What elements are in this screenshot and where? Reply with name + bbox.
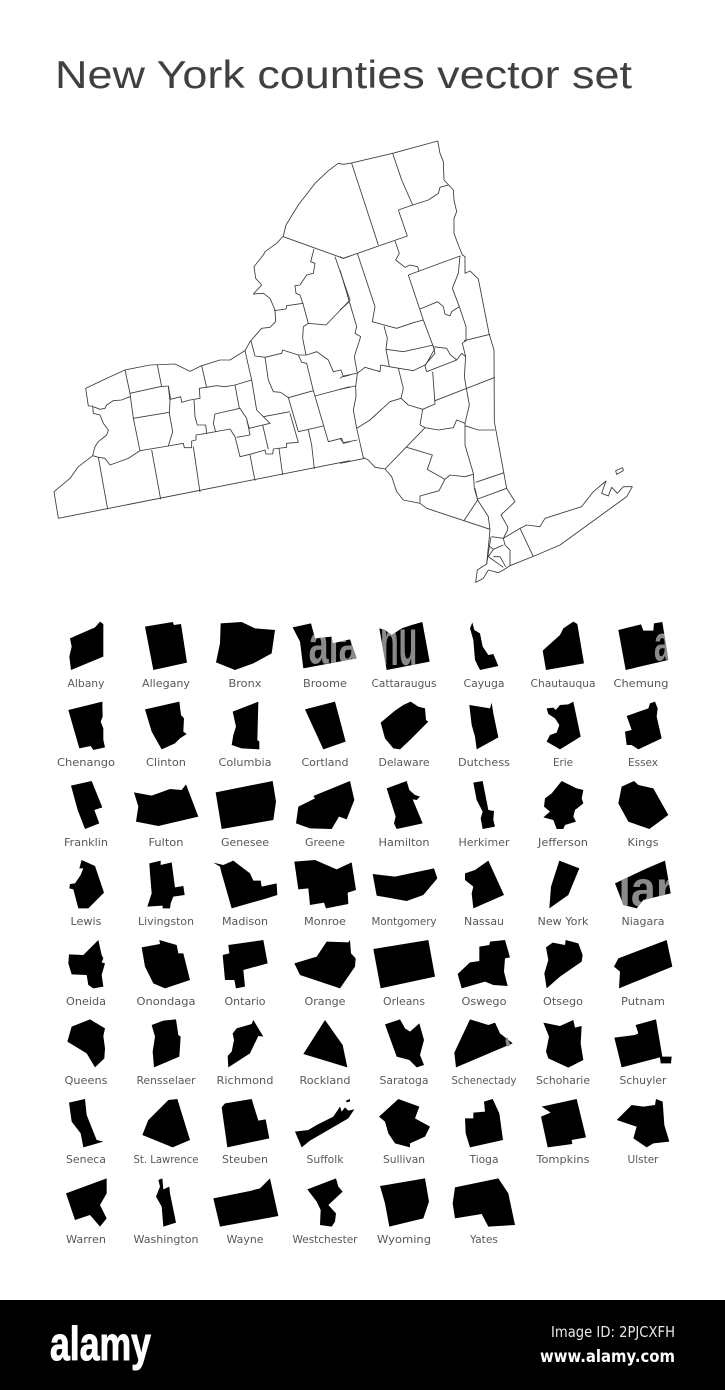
county: Albany: Albany — [68, 678, 104, 690]
county: Cayuga — [464, 622, 504, 690]
county: Schoharie: Schoharie — [536, 1075, 590, 1087]
county: Erie — [547, 702, 581, 769]
county: Orange: Orange — [304, 996, 346, 1008]
county: Oneida — [66, 940, 106, 1008]
county: Sullivan: Sullivan — [383, 1154, 425, 1166]
county: Wyoming — [377, 1178, 431, 1246]
county: Kings: Kings — [628, 837, 658, 849]
county: Cortland: Cortland — [302, 757, 348, 769]
county: Rensselaer: Rensselaer — [136, 1075, 196, 1087]
county: Greene — [296, 781, 354, 849]
county: Ulster — [617, 1099, 669, 1166]
county: Columbia: Columbia — [218, 757, 272, 769]
county: Monroe: Monroe — [304, 916, 346, 928]
county: Albany — [68, 622, 104, 690]
county: Essex — [625, 702, 662, 769]
county: Queens — [64, 1019, 108, 1087]
county: Clinton — [145, 702, 187, 769]
county: Bronx — [216, 622, 275, 690]
county: Herkimer — [458, 781, 510, 849]
county: Wyoming: Wyoming — [377, 1234, 431, 1246]
county: Oswego: Oswego — [462, 996, 506, 1008]
county: Tioga: Tioga — [468, 1154, 498, 1166]
county: Schuyler — [614, 1019, 672, 1087]
county: Schoharie — [536, 1020, 590, 1087]
county: Chemung: Chemung — [614, 678, 668, 690]
county: Monroe — [294, 860, 356, 928]
county: Nassau: Nassau — [464, 916, 504, 928]
county: Jefferson — [537, 781, 588, 849]
county: Rensselaer — [136, 1019, 196, 1087]
county: Ontario — [223, 940, 268, 1008]
county: Wayne — [213, 1178, 278, 1246]
county: Tompkins: Tompkins — [535, 1154, 590, 1166]
county: Schenectady — [452, 1019, 516, 1087]
county: Richmond — [216, 1020, 274, 1087]
county: Seneca: Seneca — [66, 1154, 106, 1166]
county: Oswego — [458, 940, 510, 1008]
county: Cortland — [302, 702, 348, 769]
county: Ontario: Ontario — [224, 996, 266, 1008]
county: Genesee: Genesee — [221, 837, 269, 849]
county: Onondaga — [136, 940, 196, 1008]
county: Allegany — [142, 622, 190, 690]
county: New York: New York — [538, 916, 589, 928]
county: Madison — [213, 861, 277, 928]
county: Chemung — [614, 622, 668, 689]
county: Bronx: Bronx — [228, 678, 262, 690]
county: Montgomery — [372, 868, 437, 928]
county: Tompkins — [535, 1099, 590, 1166]
county: Livingston — [138, 861, 194, 928]
county: Warren — [66, 1178, 107, 1246]
county: Warren: Warren — [66, 1234, 106, 1246]
county: Chenango — [57, 702, 115, 769]
county: Fulton: Fulton — [148, 837, 184, 849]
county: Hamilton: Hamilton — [378, 837, 430, 849]
county: Saratoga: Saratoga — [380, 1075, 428, 1087]
county: Genesee — [216, 781, 276, 849]
website: www.alamy.com — [540, 1347, 675, 1367]
county: Onondaga: Onondaga — [136, 996, 196, 1008]
county: Dutchess — [458, 703, 510, 769]
county: Cattaraugus: nu — [380, 606, 417, 680]
county: Columbia — [218, 702, 272, 769]
county: Richmond: Richmond — [216, 1075, 274, 1087]
county: Delaware — [378, 702, 430, 769]
county: Dutchess: Dutchess — [458, 757, 510, 769]
county: Otsego: Otsego — [543, 996, 583, 1008]
map: eastern counties and Long Island — [340, 141, 632, 582]
county: Broome: ala — [309, 613, 359, 676]
logo: alamy: alamy — [50, 1317, 151, 1370]
county: Oneida: Oneida — [66, 996, 106, 1008]
county: Ulster: Ulster — [628, 1154, 659, 1166]
county: Allegany: Allegany — [142, 678, 190, 690]
county: Erie: Erie — [553, 757, 573, 769]
county: Franklin — [64, 781, 108, 849]
county: Lewis — [69, 860, 104, 928]
county: Washington — [134, 1178, 198, 1246]
county: Niagara: Niagara — [622, 916, 664, 928]
county: Montgomery: Montgomery — [372, 916, 436, 928]
county: Suffolk — [295, 1099, 354, 1166]
county: Westchester — [292, 1178, 358, 1246]
county: Delaware: Delaware — [378, 757, 430, 769]
county: St. Lawrence — [134, 1099, 198, 1166]
county: Madison: Madison — [222, 916, 268, 928]
county: Sullivan — [379, 1099, 430, 1166]
county: Putnam: Putnam — [621, 996, 665, 1008]
county: Seneca — [66, 1099, 106, 1166]
county: Orleans: Orleans — [383, 996, 425, 1008]
county: Chautauqua — [530, 622, 596, 690]
county: Essex: Essex — [628, 757, 658, 769]
footer bar — [0, 1300, 725, 1390]
county: Yates — [453, 1178, 515, 1246]
county: Kings — [618, 781, 668, 849]
county: St. Lawrence: St. Lawrence — [134, 1154, 198, 1166]
county: Chemung: a — [654, 616, 671, 672]
county: Herkimer: Herkimer — [458, 837, 510, 849]
county: Hamilton — [378, 781, 430, 849]
map: New York state counties outline — [54, 141, 632, 582]
county: Rockland — [300, 1020, 350, 1087]
county: Queens: Queens — [64, 1075, 108, 1087]
county: Orange — [294, 940, 356, 1008]
county: Lewis: Lewis — [70, 916, 102, 928]
county: Nassau — [464, 861, 504, 928]
county: Orleans — [373, 940, 435, 1008]
image ID: Image ID: 2PJCXFH — [551, 1323, 675, 1341]
county: Greene: Greene — [305, 837, 345, 849]
county: Broome: Broome — [303, 678, 347, 690]
county: Franklin: Franklin — [64, 837, 108, 849]
county: Tioga — [465, 1099, 503, 1166]
county: Niagara: lar — [618, 861, 673, 917]
county: Chenango: Chenango — [57, 757, 115, 769]
county: Steuben: Steuben — [222, 1154, 268, 1166]
county: Washington: Washington — [134, 1234, 198, 1246]
county: Livingston: Livingston — [138, 916, 194, 928]
county: Broome — [292, 623, 357, 687]
county: Jefferson: Jefferson — [537, 837, 588, 849]
county: Suffolk: Suffolk — [306, 1154, 344, 1166]
county: Rockland: Rockland — [300, 1075, 350, 1087]
county: Putnam — [614, 940, 672, 1008]
county: New York — [538, 861, 589, 928]
county: Cattaraugus: Cattaraugus — [372, 678, 436, 690]
map: western counties — [54, 163, 350, 518]
county: Otsego — [543, 940, 583, 1008]
county: Steuben — [222, 1099, 269, 1166]
county: Schenectady: Schenectady — [452, 1075, 516, 1087]
county: Fulton — [134, 784, 198, 849]
county: Chautauqua: Chautauqua — [530, 678, 596, 690]
county: Saratoga — [380, 1019, 428, 1087]
county: Schuyler: Schuyler — [620, 1075, 667, 1087]
county: Westchester: Westchester — [292, 1234, 358, 1246]
county: Cattaraugus — [372, 622, 436, 689]
county: Wayne: Wayne — [226, 1234, 264, 1246]
county: Clinton: Clinton — [146, 757, 186, 769]
county: Yates: Yates — [469, 1234, 498, 1246]
county: Cayuga: Cayuga — [464, 678, 504, 690]
title: New York counties vector set — [55, 54, 632, 97]
